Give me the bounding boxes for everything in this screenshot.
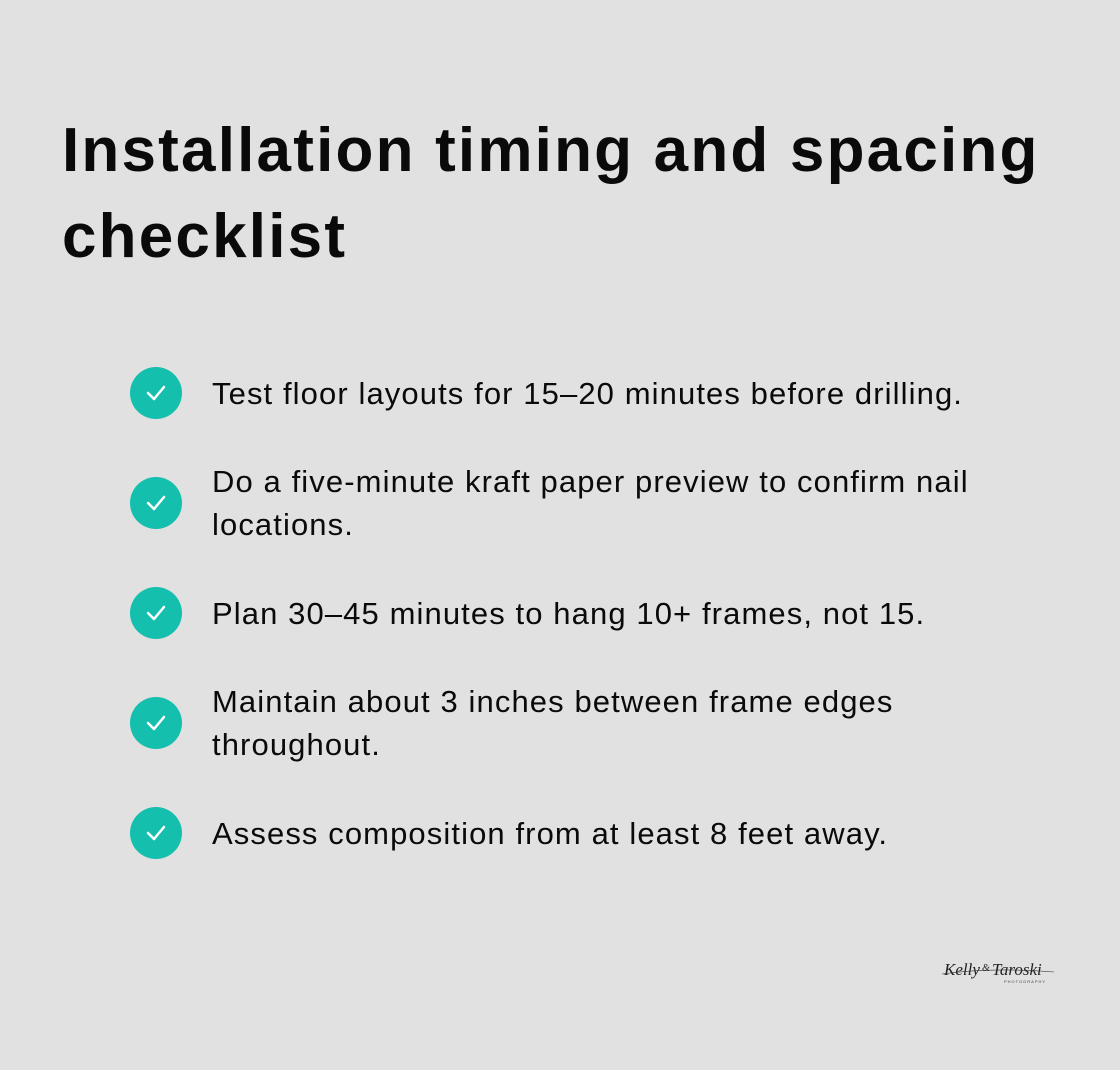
- icon: check: [130, 807, 182, 859]
- item 3: [130, 587, 925, 639]
- text: Test floor layouts for 15–20 minutes before drilling.: [212, 376, 963, 410]
- icon: check: [130, 587, 182, 639]
- signature logo: PHOTOGRAPHY: [1004, 979, 1046, 984]
- item 1: [130, 367, 963, 419]
- text: Do a five-minute kraft paper preview to confirm nail locations.: [212, 464, 969, 542]
- text: Assess composition from at least 8 feet away.: [212, 816, 888, 850]
- item 5: [130, 807, 888, 859]
- signature logo: &: [982, 963, 990, 974]
- item 4: [130, 684, 893, 762]
- icon: check: [130, 367, 182, 419]
- title: Installation timing and spacing checklist: [62, 116, 1040, 271]
- signature logo: [942, 960, 1054, 984]
- item 2: [130, 464, 969, 542]
- icon: check: [130, 477, 182, 529]
- signature logo: Taroski: [992, 960, 1042, 979]
- text: Maintain about 3 inches between frame edges throughout.: [212, 684, 893, 762]
- text: Plan 30–45 minutes to hang 10+ frames, not 15.: [212, 596, 925, 630]
- signature logo: Kelly: [943, 960, 980, 979]
- icon: check: [130, 697, 182, 749]
